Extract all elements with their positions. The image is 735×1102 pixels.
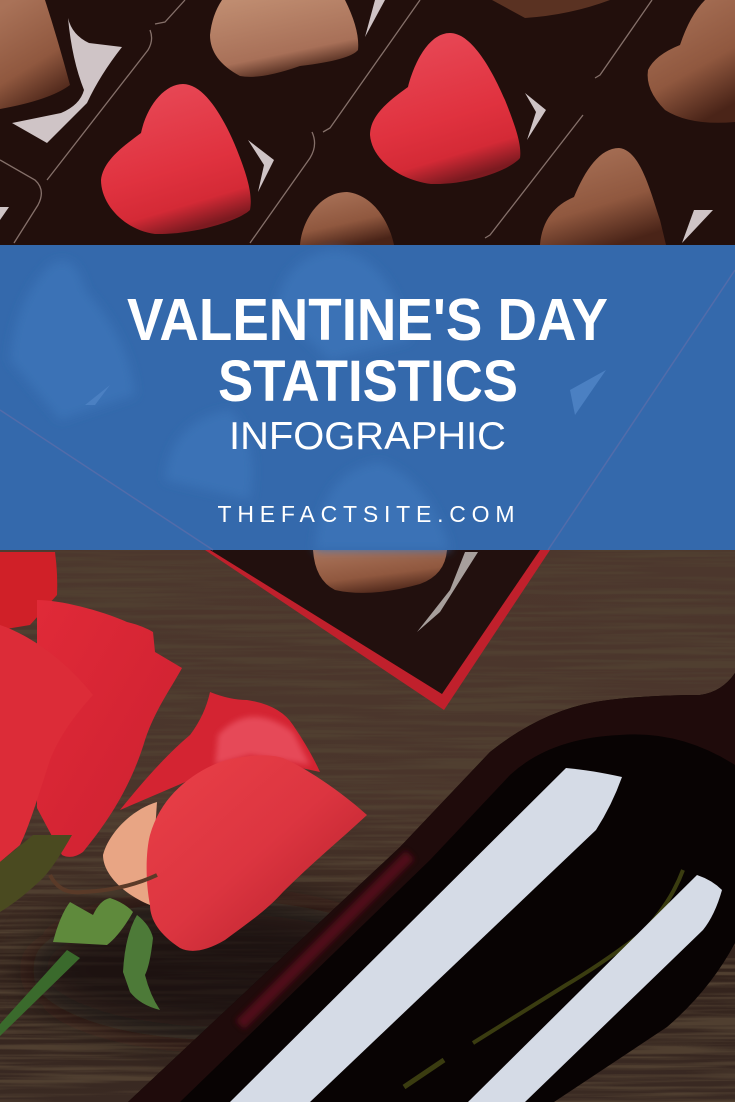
ghosted tray reflections: [85, 370, 606, 415]
photo: red gift box corner: [205, 550, 550, 710]
tray reflections: [0, 0, 713, 243]
photo: chocolate tray with heart chocolates: [0, 0, 735, 246]
photo: wine bottle: [128, 673, 735, 1102]
photo: wooden table: [0, 550, 735, 1102]
photo: red roses: [0, 552, 367, 1036]
banner: [0, 245, 735, 550]
subtitle: INFOGRAPHIC: [229, 415, 506, 458]
website: THEFACTSITE.COM: [218, 501, 514, 527]
title: VALENTINE'S DAY: [127, 287, 608, 353]
title line 2: STATISTICS: [218, 349, 518, 414]
ghosted tray shapes: [10, 250, 450, 550]
chocolates: [0, 0, 735, 245]
